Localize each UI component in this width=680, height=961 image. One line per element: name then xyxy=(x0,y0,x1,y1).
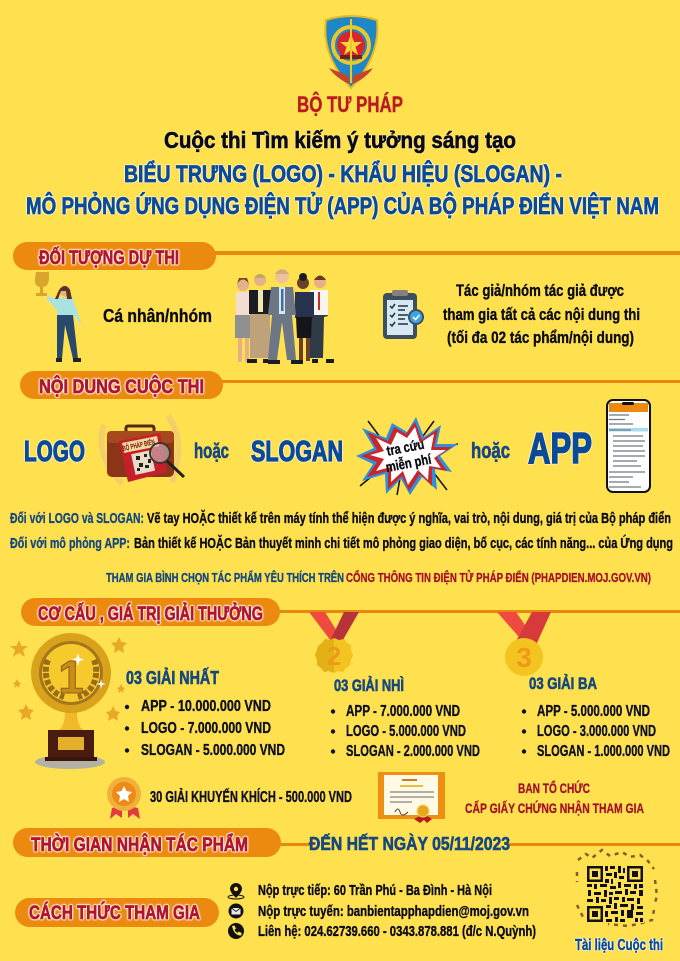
text: app rule: Đối với mô phỏng APP: xyxy=(10,535,130,552)
icon: clipboard checklist xyxy=(383,290,424,339)
text: authors note: Tác giả/nhóm tác giả được xyxy=(456,282,624,300)
panel: third prize xyxy=(522,674,670,760)
text: certificate note xyxy=(465,779,644,816)
text: encouragement prizes: 30 GIẢI KHUYẾN KHÍCH - 500.000 VND xyxy=(150,789,352,806)
icon: email xyxy=(228,904,244,918)
label: logo: LOGO xyxy=(24,436,85,468)
section heading: how to join xyxy=(15,898,219,927)
title line 1: Cuộc thi Tìm kiếm ý tưởng sáng tạo xyxy=(164,127,516,153)
section: how to join xyxy=(15,850,663,954)
text: submit in person: Nộp trực tiếp: 60 Trần Phú - Ba Đình - Hà Nội xyxy=(258,883,492,899)
section heading: deadline: THỜI GIAN NHẬN TÁC PHẨM xyxy=(31,834,248,856)
label: or: hoặc xyxy=(194,440,229,463)
section heading: how to join: CÁCH THỨC THAM GIA xyxy=(29,902,200,924)
text: voting note xyxy=(106,570,651,585)
header xyxy=(26,16,659,220)
label: or: hoặc xyxy=(471,438,510,463)
list: second prize amounts: SLOGAN - 2.000.000 VND xyxy=(346,743,480,760)
icon: encouragement rosette xyxy=(107,777,141,819)
text: authors note: (tối đa 02 tác phẩm/nội dung) xyxy=(447,329,634,347)
icon: ministry emblem xyxy=(325,16,377,88)
list: first prize amounts: LOGO - 7.000.000 VND xyxy=(141,720,271,737)
list: first prize amounts: APP - 10.000.000 VND xyxy=(141,698,271,715)
list: first prize amounts xyxy=(125,698,285,759)
section heading: contest content: NỘI DUNG CUỘC THI xyxy=(39,376,204,398)
heading: third prize: 03 GIẢI BA xyxy=(529,674,597,693)
section: prizes xyxy=(10,598,680,823)
list: second prize amounts: LOGO - 5.000.000 VND xyxy=(346,723,466,740)
title line 2: BIỂU TRƯNG (LOGO) - KHẨU HIỆU (SLOGAN) - xyxy=(124,160,562,188)
icon: QR code xyxy=(577,850,657,926)
section heading: contest content xyxy=(20,371,680,399)
label: app: APP xyxy=(528,424,592,473)
heading: second prize: 03 GIẢI NHÌ xyxy=(334,676,404,695)
icon: comic burst free lookup xyxy=(356,417,458,495)
icon: bronze medal 3: 3 xyxy=(516,642,532,673)
section: contest content xyxy=(10,371,680,585)
icon: silver medal 2: 2 xyxy=(327,641,341,671)
icon: location pin xyxy=(228,883,244,899)
section heading: participants: ĐỐI TƯỢNG DỰ THI xyxy=(39,247,179,269)
icon: comic burst free lookup: miễn phí xyxy=(384,450,433,475)
section heading: prizes xyxy=(21,598,680,626)
list: first prize amounts: SLOGAN - 5.000.000 VND xyxy=(141,742,285,759)
text: submit online: Nộp trực tuyến: banbientapphapdien@moj.gov.vn xyxy=(258,904,529,920)
text: voting note: THAM GIA BÌNH CHỌN TÁC PHẨM YÊU THÍCH TRÊN xyxy=(106,570,344,585)
panel: second prize xyxy=(331,676,480,760)
text: deadline date: ĐẾN HẾT NGÀY 05/11/2023 xyxy=(309,833,510,854)
icon: bronze medal 3 xyxy=(497,612,551,676)
section: participants xyxy=(13,242,680,364)
section heading: prizes: CƠ CẤU , GIÁ TRỊ GIẢI THƯỞNG xyxy=(38,603,263,625)
text: certificate note: BAN TỔ CHỨC xyxy=(518,779,590,796)
heading: first prize: 03 GIẢI NHẤT xyxy=(126,667,219,688)
label: individual or group: Cá nhân/nhóm xyxy=(103,305,212,326)
icon: gold trophy with stars xyxy=(10,633,127,769)
section heading: participants xyxy=(13,242,680,270)
panel: first prize xyxy=(125,667,285,759)
list: third prize amounts xyxy=(522,703,670,760)
label: slogan: SLOGAN xyxy=(251,436,343,468)
icon: briefcase with law book xyxy=(101,416,184,484)
text: contact: Liên hệ: 024.62739.660 - 0343.878.881 (đ/c N.Quỳnh) xyxy=(258,924,536,940)
section heading: deadline xyxy=(13,828,680,857)
list: second prize amounts: APP - 7.000.000 VND xyxy=(346,703,460,720)
list: second prize amounts xyxy=(331,703,480,760)
icon: group of five people xyxy=(235,269,334,364)
icon: gold trophy with stars: 1 xyxy=(58,651,84,703)
icon: silver medal 2 xyxy=(309,612,359,673)
icon: phone xyxy=(228,923,244,939)
icon: phone with list xyxy=(607,400,650,492)
icon: certificate xyxy=(378,772,445,823)
section: deadline xyxy=(13,828,680,857)
icon: woman holding trophy xyxy=(35,272,81,362)
text: logo and slogan rule: Đối với LOGO và SLOGAN: xyxy=(10,510,144,527)
heading: ministry name: BỘ TƯ PHÁP xyxy=(297,92,403,117)
icon: comic burst free lookup: tra cứu xyxy=(385,436,425,459)
icon: briefcase with law book: BỘ PHÁP ĐIỂN xyxy=(122,437,156,453)
text: authors note xyxy=(443,282,640,347)
